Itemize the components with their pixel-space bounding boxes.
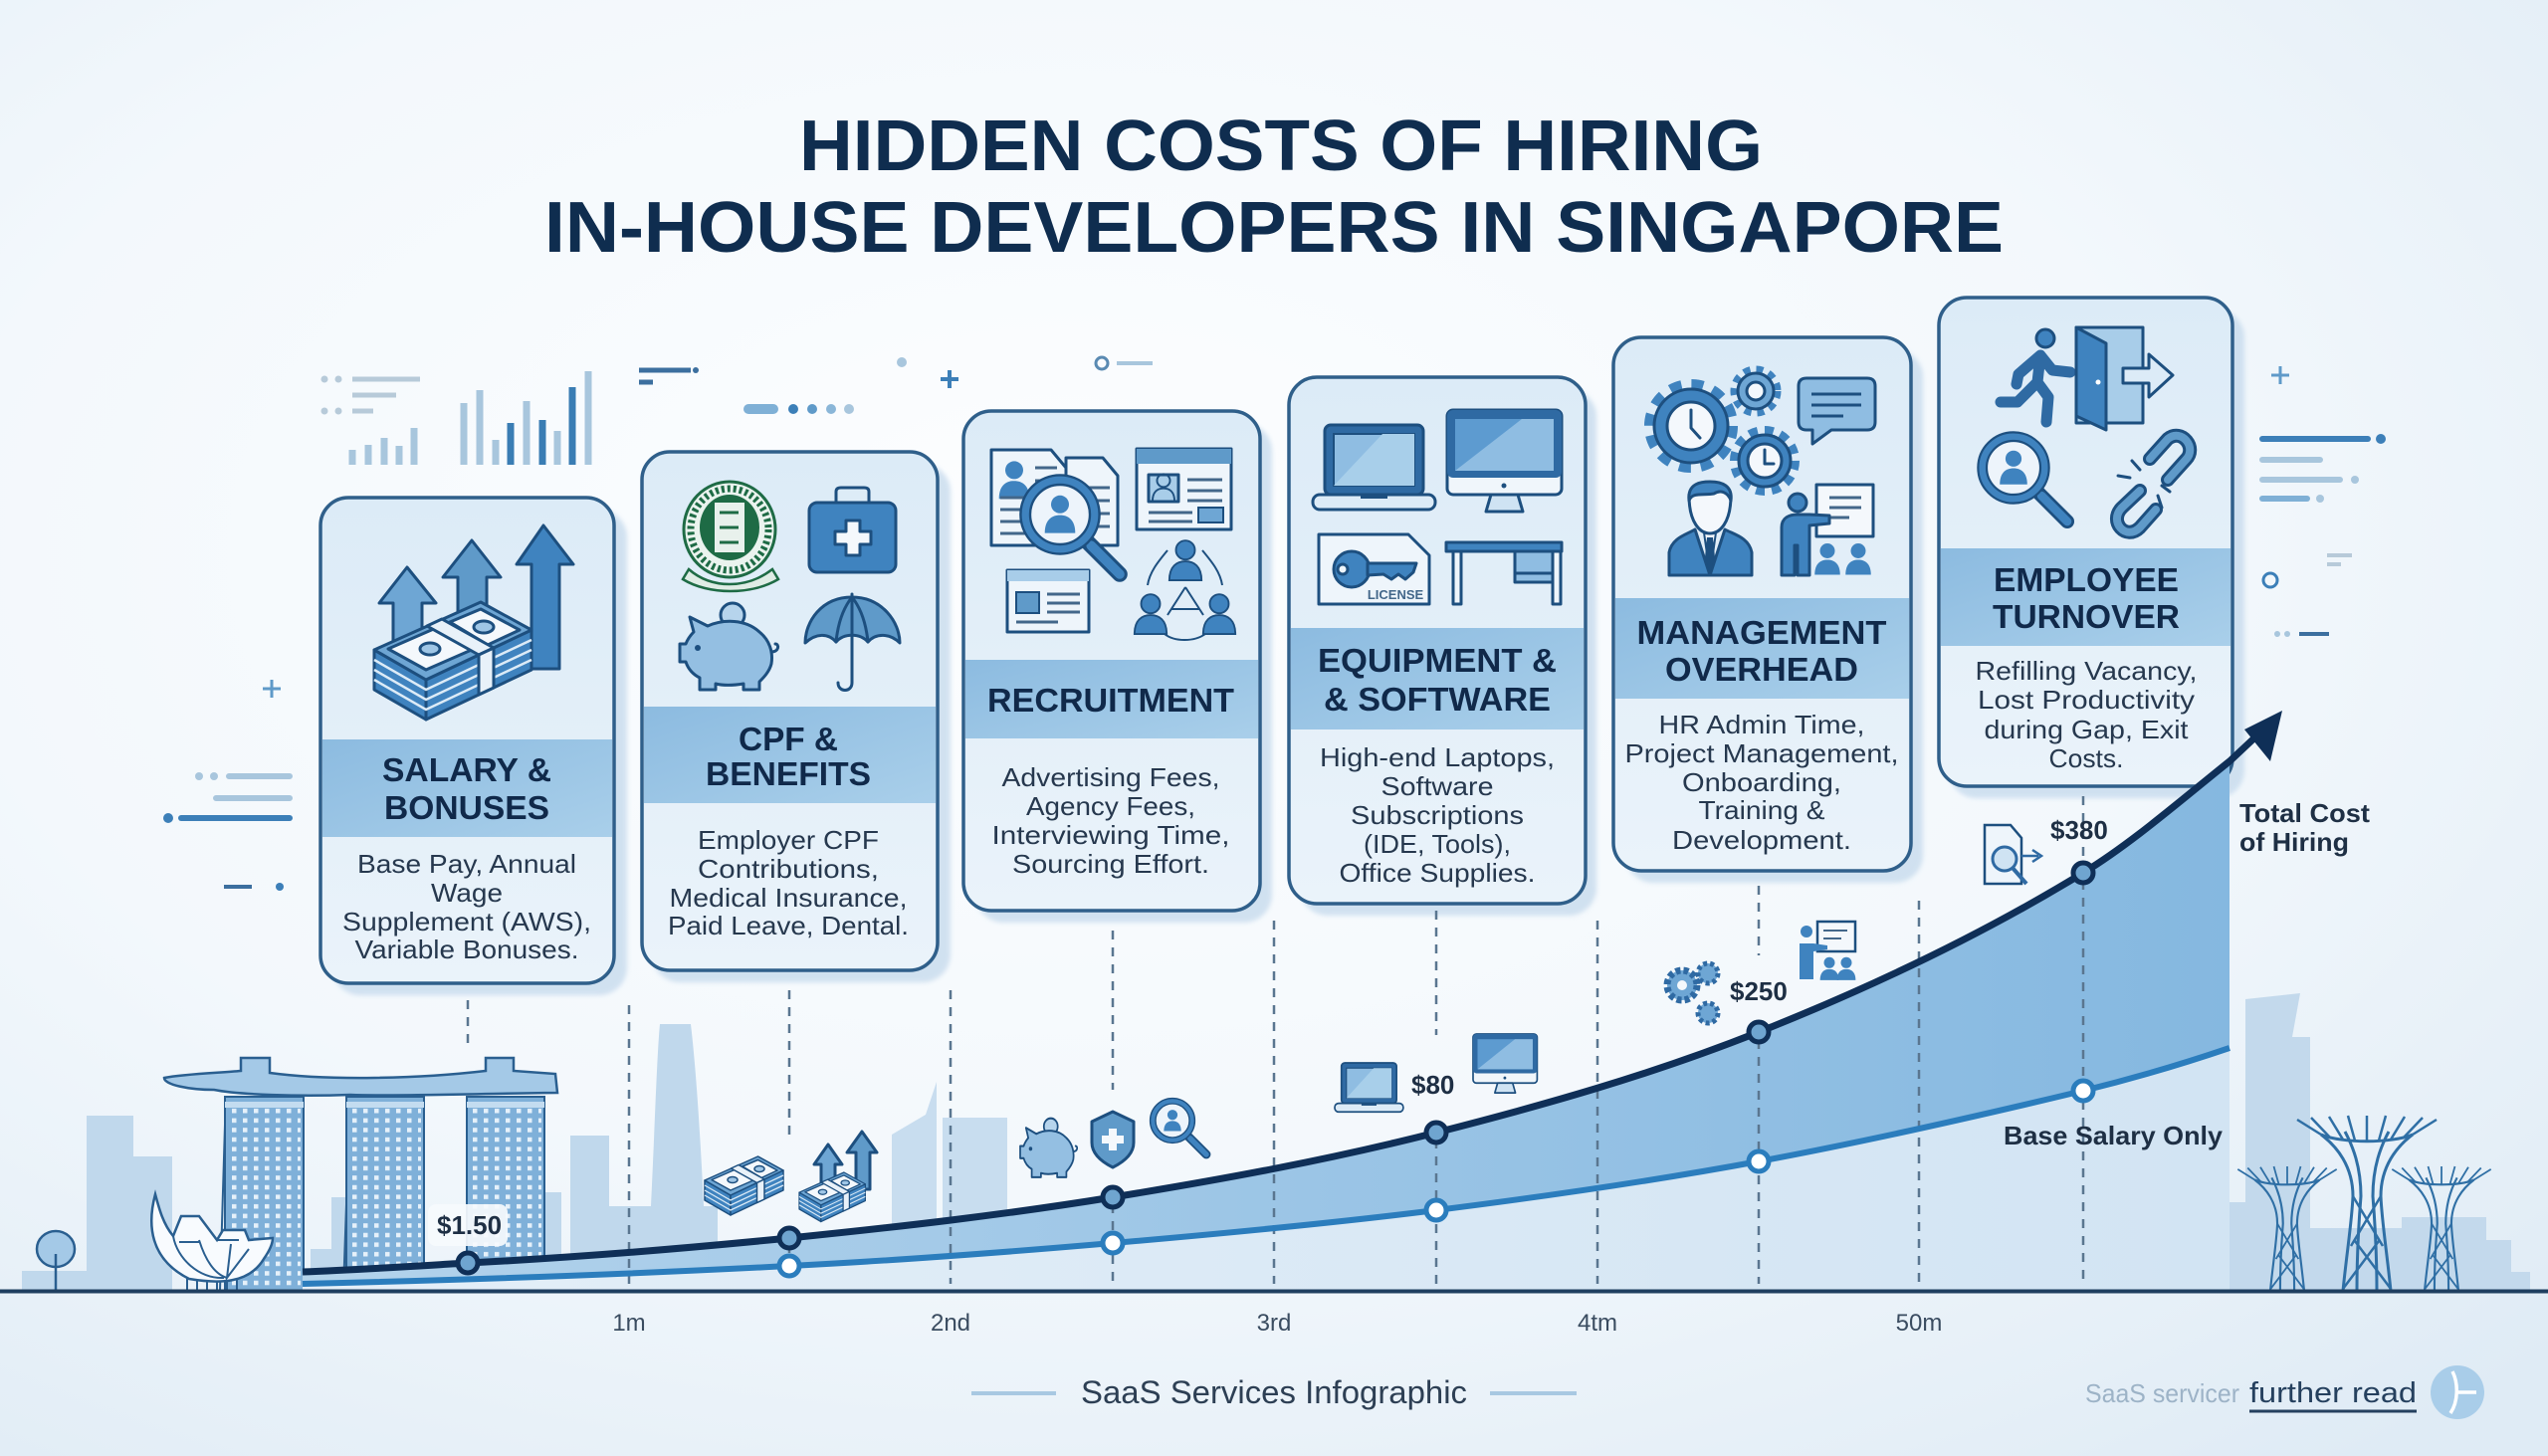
icon: money and rising arrows <box>374 525 573 720</box>
panel: employee turnover: Lost Productivity <box>1978 685 2195 715</box>
icon: manager <box>1669 482 1752 575</box>
chart: cost curve <box>303 711 2282 1291</box>
panel: management overhead: OVERHEAD <box>1665 651 1858 688</box>
panel: employee turnover: TURNOVER <box>1993 598 2180 635</box>
panel: salary and bonuses: BONUSES <box>384 789 549 826</box>
value: $1.50: $1.50 <box>437 1210 502 1240</box>
icon: broken chain <box>2117 436 2190 532</box>
icon: presenter with audience <box>1782 485 1873 575</box>
icon: team network <box>1135 540 1235 640</box>
footer link <box>2085 1365 2484 1419</box>
panel: employee turnover: during Gap, Exit <box>1985 715 2189 744</box>
panel: management overhead: HR Admin Time, <box>1658 710 1865 739</box>
landmark: Marina Bay Sands <box>164 1058 557 1291</box>
panel: CPF and benefits <box>642 452 951 982</box>
icon: umbrella <box>805 594 900 691</box>
dashed guides <box>468 796 2083 1284</box>
skyline: left <box>22 1024 1007 1291</box>
panel: recruitment: Sourcing Effort. <box>1012 849 1209 879</box>
panel: CPF and benefits: Paid Leave, Dental. <box>668 911 909 940</box>
panel: equipment and software: (IDE, Tools), <box>1364 829 1511 859</box>
footer caption: SaaS Services Infographic <box>1081 1374 1467 1410</box>
panel: employee turnover: EMPLOYEE <box>1994 561 2179 598</box>
base salary nodes <box>779 1081 2093 1276</box>
icon: gears with clocks <box>1649 369 1796 492</box>
icon: medical bag <box>809 488 896 572</box>
icon: CPF seal <box>683 482 778 591</box>
decorative data marks: left <box>163 680 290 891</box>
axis labels: 1m <box>612 1310 646 1337</box>
icons: gears and presenter on chart <box>1667 922 1855 1023</box>
area between base salary and total cost <box>303 761 2230 1284</box>
area under base salary <box>303 1048 2230 1291</box>
arrowhead <box>2244 711 2282 761</box>
label: total cost of hiring <box>2239 798 2370 857</box>
panel: salary and bonuses: Variable Bonuses. <box>354 935 579 964</box>
icon: license key <box>1319 534 1429 604</box>
value: $1.50 <box>428 1204 508 1246</box>
title <box>544 106 2004 268</box>
panel: management overhead <box>1613 337 1923 883</box>
label: base salary only: Base Salary Only <box>2004 1121 2224 1150</box>
icon: laptop <box>1313 425 1435 510</box>
title: HIDDEN COSTS OF HIRING <box>799 106 1763 186</box>
icon: desk <box>1446 542 1562 604</box>
axis baseline <box>0 1290 2548 1294</box>
decorative data marks: right <box>2262 366 2386 637</box>
panel: management overhead: Project Management, <box>1624 738 1899 768</box>
footer link: SaaS servicer <box>2085 1378 2239 1408</box>
panel: CPF and benefits: CPF & <box>739 721 838 757</box>
panel: equipment and software: & SOFTWARE <box>1324 681 1551 718</box>
axis labels: 2nd <box>931 1310 970 1337</box>
icons: money stacks on chart <box>705 1132 877 1222</box>
total cost nodes <box>458 863 2093 1273</box>
axis labels: 4tm <box>1578 1310 1617 1337</box>
base salary line <box>303 1048 2230 1284</box>
icon: resumes with magnifier <box>991 450 1120 574</box>
panel: management overhead: Training & <box>1698 795 1825 825</box>
tree <box>37 1231 75 1291</box>
icon: license key: LICENSE <box>1368 587 1423 602</box>
icon: piggy bank <box>680 603 778 690</box>
panel: employee turnover: Costs. <box>2048 743 2124 773</box>
panel: employee turnover: Refilling Vacancy, <box>1975 656 2198 686</box>
panel: salary and bonuses: Base Pay, Annual <box>357 849 576 879</box>
title: IN-HOUSE DEVELOPERS IN SINGAPORE <box>544 188 2004 268</box>
panel: management overhead: Development. <box>1672 825 1851 855</box>
landmark: ArtScience Museum <box>151 1194 273 1291</box>
icon: job listing window <box>1007 570 1089 632</box>
axis labels <box>612 1310 1942 1337</box>
panel: salary and bonuses: Supplement (AWS), <box>342 907 591 936</box>
axis labels: 3rd <box>1257 1310 1291 1337</box>
label: total cost of hiring: of Hiring <box>2239 827 2349 857</box>
panel: CPF and benefits: Medical Insurance, <box>669 883 908 913</box>
panel: equipment and software: Office Supplies. <box>1340 858 1535 888</box>
value: $250: $250 <box>1730 976 1788 1006</box>
value: $380: $380 <box>2050 815 2108 845</box>
icon: monitor <box>1447 410 1562 512</box>
icon: speech bubble <box>1799 378 1875 444</box>
panel: CPF and benefits: Employer CPF <box>698 825 879 855</box>
panel: recruitment: Interviewing Time, <box>991 820 1230 850</box>
panel: equipment and software: High-end Laptops, <box>1320 742 1555 772</box>
footer link: further read <box>2249 1377 2417 1409</box>
panel: equipment and software: Software <box>1381 771 1493 801</box>
icons: piggy, shield, magnifier on chart <box>1020 1101 1206 1177</box>
panel: management overhead: MANAGEMENT <box>1636 614 1887 651</box>
panel: salary and bonuses: SALARY & <box>382 751 551 788</box>
panel: employee turnover <box>1939 298 2244 798</box>
panel: recruitment: Agency Fees, <box>1026 791 1195 821</box>
icon: person running out of door <box>2001 327 2173 430</box>
icon: profile window <box>1137 449 1231 529</box>
panel: CPF and benefits: BENEFITS <box>706 755 871 792</box>
landmark: Supertrees <box>2237 1116 2491 1291</box>
icon: magnifier with person <box>1983 437 2067 521</box>
panel: CPF and benefits: Contributions, <box>698 854 879 884</box>
panel: recruitment: RECRUITMENT <box>987 682 1234 719</box>
total cost line <box>303 731 2261 1272</box>
panel: equipment and software: Subscriptions <box>1351 800 1524 830</box>
label: total cost of hiring: Total Cost <box>2239 798 2370 828</box>
icons: laptop and monitor on chart <box>1335 1034 1537 1112</box>
decorative data marks: top left <box>320 357 1153 465</box>
panel: salary and bonuses: Wage <box>431 878 503 908</box>
axis labels: 50m <box>1896 1310 1942 1337</box>
value: $80: $80 <box>1411 1070 1454 1100</box>
panel: salary and bonuses <box>320 498 627 995</box>
panel: equipment and software <box>1289 377 1596 916</box>
skyline: right <box>2229 993 2530 1291</box>
panel: equipment and software: EQUIPMENT & <box>1318 642 1557 679</box>
panel: recruitment: Advertising Fees, <box>1001 762 1220 792</box>
icon: document search on chart <box>1985 825 2041 884</box>
panel: management overhead: Onboarding, <box>1682 767 1841 797</box>
panel: recruitment <box>963 411 1272 923</box>
